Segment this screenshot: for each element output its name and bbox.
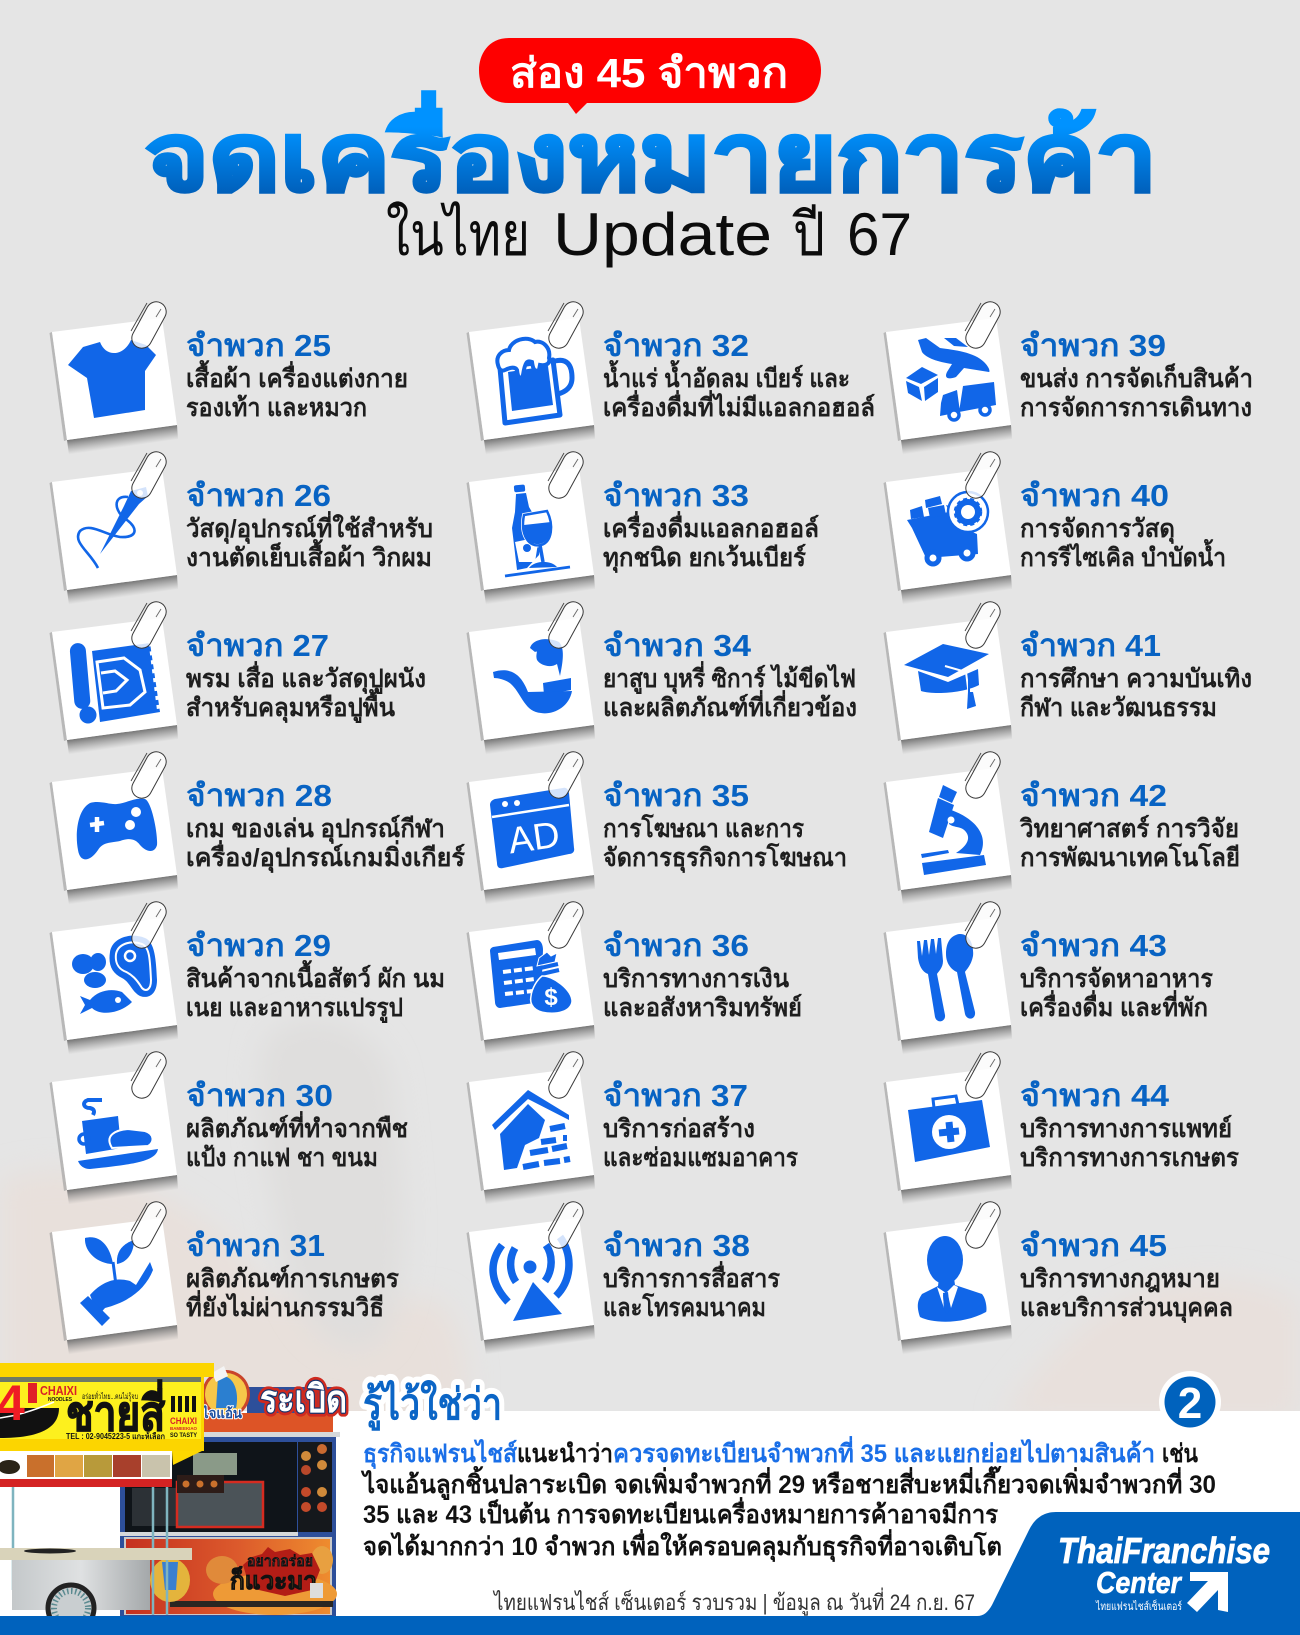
class 40: [884, 448, 1226, 605]
description: [603, 1261, 781, 1322]
sign: ชายสี่: ชายสี่: [66, 1379, 166, 1441]
description: [603, 359, 875, 422]
heading: จำพวก 40: [1020, 478, 1169, 513]
sign: ชายสี่: CHAIXI: [40, 1383, 77, 1398]
description: [186, 959, 445, 1024]
title badge: ส่อง 45 จำพวก: [479, 38, 821, 114]
heading: จำพวก 32: [603, 328, 749, 363]
description: เนย และอาหารแปรรูป: [186, 994, 403, 1024]
description: [1019, 814, 1240, 872]
icon: calculator and money bag: $: [544, 984, 558, 1011]
description: การโฆษณา และการ: [603, 813, 805, 843]
description: ที่ยังไม่ผ่านกรรมวิธี: [186, 1290, 384, 1322]
description: ขนส่ง การจัดเก็บสินค้า: [1020, 363, 1253, 393]
icon: carpet roll: [69, 642, 162, 724]
icon: recycling cart and gear: [907, 492, 988, 564]
logo: ThaiFranchise Center: ไทยแฟรนไชส์เซ็นเตอร์: [1095, 1599, 1182, 1613]
heading: จำพวก 36: [603, 928, 749, 963]
description: จัดการธุรกิจการโฆษณา: [603, 842, 847, 874]
description: [186, 359, 408, 422]
class 36: [466, 898, 802, 1055]
heading: จำพวก 42: [1020, 778, 1167, 813]
description: [186, 661, 426, 724]
number badge: 2: [1178, 1379, 1202, 1428]
class 42: [884, 748, 1240, 905]
icon: signal tower: [493, 1237, 569, 1321]
heading: จำพวก 25: [186, 328, 331, 363]
heading: จำพวก 38: [603, 1228, 750, 1263]
heading: จำพวก 39: [1020, 328, 1166, 363]
menu strip: [0, 1451, 172, 1487]
description: เครื่องดื่มแอลกอฮอล์: [603, 511, 819, 543]
class 31: [50, 1198, 400, 1355]
heading: จำพวก 37: [603, 1078, 748, 1113]
description: บริการการสื่อสาร: [603, 1261, 781, 1293]
description: ทุกชนิด ยกเว้นเบียร์: [603, 543, 807, 574]
body text: ไจแอ้นลูกชิ้นปลาระเบิด จดเพิ่มจำพวกที่ 29 หรือชายสี่บะหมี่เกี๊ยวจดเพิ่มจำพวกที่ 30: [360, 1465, 1216, 1501]
body text: เช่น: [1162, 1440, 1198, 1468]
description: กีฬา และวัฒนธรรม: [1020, 694, 1217, 722]
heading: จำพวก 45: [1020, 1228, 1167, 1263]
description: เกม ของเล่น อุปกรณ์กีฬา: [186, 814, 445, 845]
description: สินค้าจากเนื้อสัตว์ ผัก นม: [186, 959, 445, 993]
body text: ควรจดทะเบียนจำพวกที่ 35 และแยกย่อยไปตามสินค้า: [613, 1436, 1155, 1468]
description: การพัฒนาเทคโนโลยี: [1020, 842, 1240, 872]
logo: ระเบิด: ระเบิด: [260, 1379, 347, 1421]
description: วิทยาศาสตร์ การวิจัย: [1019, 814, 1239, 843]
description: และอสังหาริมทรัพย์: [603, 993, 802, 1022]
body text: [360, 1436, 1216, 1563]
heading: จำพวก 31: [186, 1228, 325, 1263]
logo: jaew aeon mascot: ไจแอ้น: [200, 1404, 242, 1421]
icon: calculator and money bag: [490, 940, 572, 1013]
description: [603, 813, 847, 874]
heading: จำพวก 29: [186, 928, 331, 963]
description: การรีไซเคิล บำบัดน้ำ: [1020, 538, 1226, 572]
description: [1020, 665, 1252, 722]
icon: meat, beans, fish: [72, 936, 157, 1014]
description: งานตัดเย็บเสื้อผ้า วิกผม: [186, 538, 432, 572]
description: การจัดการวัสดุ: [1020, 515, 1175, 545]
heading: จำพวก 41: [1020, 628, 1161, 663]
heading: รู้ไว้ใช่ว่า: รู้ไว้ใช่ว่า: [363, 1379, 502, 1431]
class 41: [884, 598, 1252, 755]
sign: ชายสี่: BAMEEKIAO: [170, 1426, 197, 1431]
number badge: [1159, 1371, 1221, 1433]
icon: AD window: AD: [506, 814, 562, 861]
description: และซ่อมแซมอาคาร: [603, 1144, 799, 1172]
description: สำหรับคลุมหรือปูพื้น: [186, 688, 395, 724]
subtitle: ปี: [792, 201, 825, 268]
icon: coffee, bread: [78, 1100, 158, 1169]
description: และบริการส่วนบุคคล: [1020, 1294, 1233, 1324]
class 28: [50, 748, 466, 905]
description: [186, 814, 466, 874]
icon: microscope: [921, 785, 986, 875]
icon: first aid case: [908, 1096, 990, 1162]
class 30: [50, 1048, 408, 1205]
description: ผลิตภัณฑ์ที่ทำจากพืช: [186, 1111, 408, 1143]
description: [1020, 965, 1214, 1022]
heading: จำพวก 35: [603, 778, 749, 813]
panel: footer white band: [0, 1411, 1300, 1616]
class 25: [50, 298, 408, 455]
heading: จำพวก 30: [186, 1078, 333, 1113]
description: บริการก่อสร้าง: [603, 1115, 755, 1143]
icon: AD window: [490, 788, 574, 868]
description: การจัดการการเดินทาง: [1020, 394, 1252, 422]
class 44: [884, 1048, 1240, 1205]
description: การศึกษา ความบันเทิง: [1020, 665, 1252, 693]
description: [1020, 515, 1226, 572]
description: บริการทางการเงิน: [603, 965, 789, 993]
icon: arrow: [1187, 1572, 1228, 1612]
description: แป้ง กาแฟ ชา ขนม: [186, 1144, 378, 1172]
subtitle: 67: [847, 201, 912, 268]
class 26: [50, 448, 433, 605]
heading: จำพวก 28: [186, 778, 332, 813]
description: [603, 511, 819, 574]
description: บริการทางการเกษตร: [1020, 1144, 1240, 1172]
description: และโทรคมนาคม: [603, 1292, 766, 1322]
class 37: [466, 1048, 799, 1205]
subtitle: Update: [553, 201, 772, 268]
class 39: [884, 298, 1253, 455]
description: ยาสูบ บุหรี่ ซิการ์ ไม้ขีดไฟ: [603, 661, 856, 695]
body text: ธุรกิจแฟรนไชส์: [363, 1438, 518, 1470]
icon: game controller: [77, 799, 157, 859]
description: เสื้อผ้า เครื่องแต่งกาย: [186, 359, 408, 393]
description: เครื่องดื่ม และที่พัก: [1020, 990, 1208, 1022]
icon: house and bricks: [492, 1090, 570, 1170]
class 45: [884, 1198, 1233, 1355]
description: [186, 1264, 400, 1322]
title: จดเครื่องหมายการค้า: [145, 91, 1157, 210]
description: [603, 1115, 799, 1172]
sign: ชายสี่: SO TASTY: [170, 1432, 198, 1439]
description: ผลิตภัณฑ์การเกษตร: [186, 1264, 400, 1293]
class 29: [50, 898, 445, 1055]
heading: จำพวก 26: [186, 478, 331, 513]
logo: jaew aeon mascot: [200, 1366, 250, 1421]
logo: ระเบิด: ระเบิด: [260, 1379, 347, 1421]
icon: wine bottle and glass: [505, 484, 570, 576]
icon: t-shirt: [68, 340, 156, 418]
sign: ชายสี่: TEL : 02-9045223-5 แกะห้เลือก: [66, 1431, 165, 1441]
description: [186, 511, 433, 572]
class 33: [466, 448, 819, 605]
body text: จดได้มากกว่า 10 จำพวก เพื่อให้ครอบคลุมกับธุรกิจที่อาจเติบโต: [363, 1529, 1002, 1563]
description: และผลิตภัณฑ์ที่เกี่ยวข้อง: [603, 690, 857, 722]
class 38: [466, 1198, 781, 1355]
heading: จำพวก 27: [186, 628, 329, 663]
description: น้ำแร่ น้ำอัดลม เบียร์ และ: [603, 359, 850, 393]
description: [1020, 1114, 1240, 1172]
icon: plane, box, truck: [906, 338, 996, 420]
description: [1020, 363, 1253, 422]
icon: person in suit: [918, 1236, 987, 1322]
class 35: [466, 748, 847, 905]
stall: ระเบิด kiosk: อยากอร่อย: [247, 1553, 313, 1570]
heading: จำพวก 43: [1020, 928, 1167, 963]
description: บริการทางการแพทย์: [1020, 1114, 1232, 1143]
icon: needle and thread: [78, 487, 148, 568]
subtitle: [386, 200, 912, 268]
description: บริการทางกฎหมาย: [1020, 1265, 1220, 1293]
icon: tobacco pipe: [493, 639, 572, 713]
cart: ชายสี่: [0, 1450, 204, 1635]
subtitle: ในไทย: [386, 200, 530, 268]
description: รองเท้า และหมวก: [186, 394, 367, 422]
heading: จำพวก 44: [1020, 1078, 1170, 1113]
class 32: [466, 298, 875, 455]
photo: food carts: [0, 1363, 347, 1635]
description: บริการจัดหาอาหาร: [1020, 965, 1214, 993]
icon: plant in hand: [80, 1237, 153, 1326]
stall: ระเบิด kiosk: ก็แวะมา: [230, 1566, 317, 1595]
sign: ชายสี่: อร่อยทั่วไทย...คนไม่รู้จบ: [82, 1390, 138, 1402]
icon: graduation cap: [904, 644, 989, 709]
logo: ThaiFranchise Center: Center: [1096, 1565, 1183, 1600]
description: เครื่องดื่มที่ไม่มีแอลกอฮอล์: [603, 390, 875, 422]
heading: จำพวก 33: [603, 478, 749, 513]
title badge: ส่อง 45 จำพวก: ส่อง 45 จำพวก: [510, 50, 788, 96]
logo: ThaiFranchise Center: [977, 1512, 1300, 1616]
icon: fork and spoon: [917, 934, 975, 1021]
body text: 35 และ 43 เป็นต้น การจดทะเบียนเครื่องหมายการค้าอาจมีการ: [363, 1497, 999, 1529]
class 43: [884, 898, 1214, 1055]
description: [603, 965, 802, 1022]
stall: ระเบิด kiosk: [120, 1387, 340, 1616]
heading: จำพวก 34: [603, 628, 752, 663]
description: เครื่อง/อุปกรณ์เกมมิ่งเกียร์: [186, 840, 466, 874]
description: วัสดุ/อุปกรณ์ที่ใช้สำหรับ: [186, 511, 433, 545]
sign: ชายสี่: NOODLES: [48, 1397, 72, 1403]
description: [1020, 1265, 1233, 1324]
sign: ชายสี่: CHAIXI: [170, 1416, 197, 1426]
description: [603, 661, 857, 722]
class 34: [466, 598, 857, 755]
footer blue bar: [0, 1616, 1300, 1635]
sign: ชายสี่: [0, 1363, 214, 1451]
source credit: ไทยแฟรนไชส์ เซ็นเตอร์ รวบรวม | ข้อมูล ณ วันที่ 24 ก.ย. 67: [492, 1587, 975, 1616]
logo: ThaiFranchise Center: ThaiFranchise: [1058, 1530, 1270, 1571]
body text: แนะนำว่า: [517, 1440, 613, 1468]
description: พรม เสื่อ และวัสดุปูผนัง: [186, 661, 426, 695]
description: [186, 1111, 408, 1172]
class 27: [50, 598, 426, 755]
icon: beer mug: [497, 339, 572, 423]
